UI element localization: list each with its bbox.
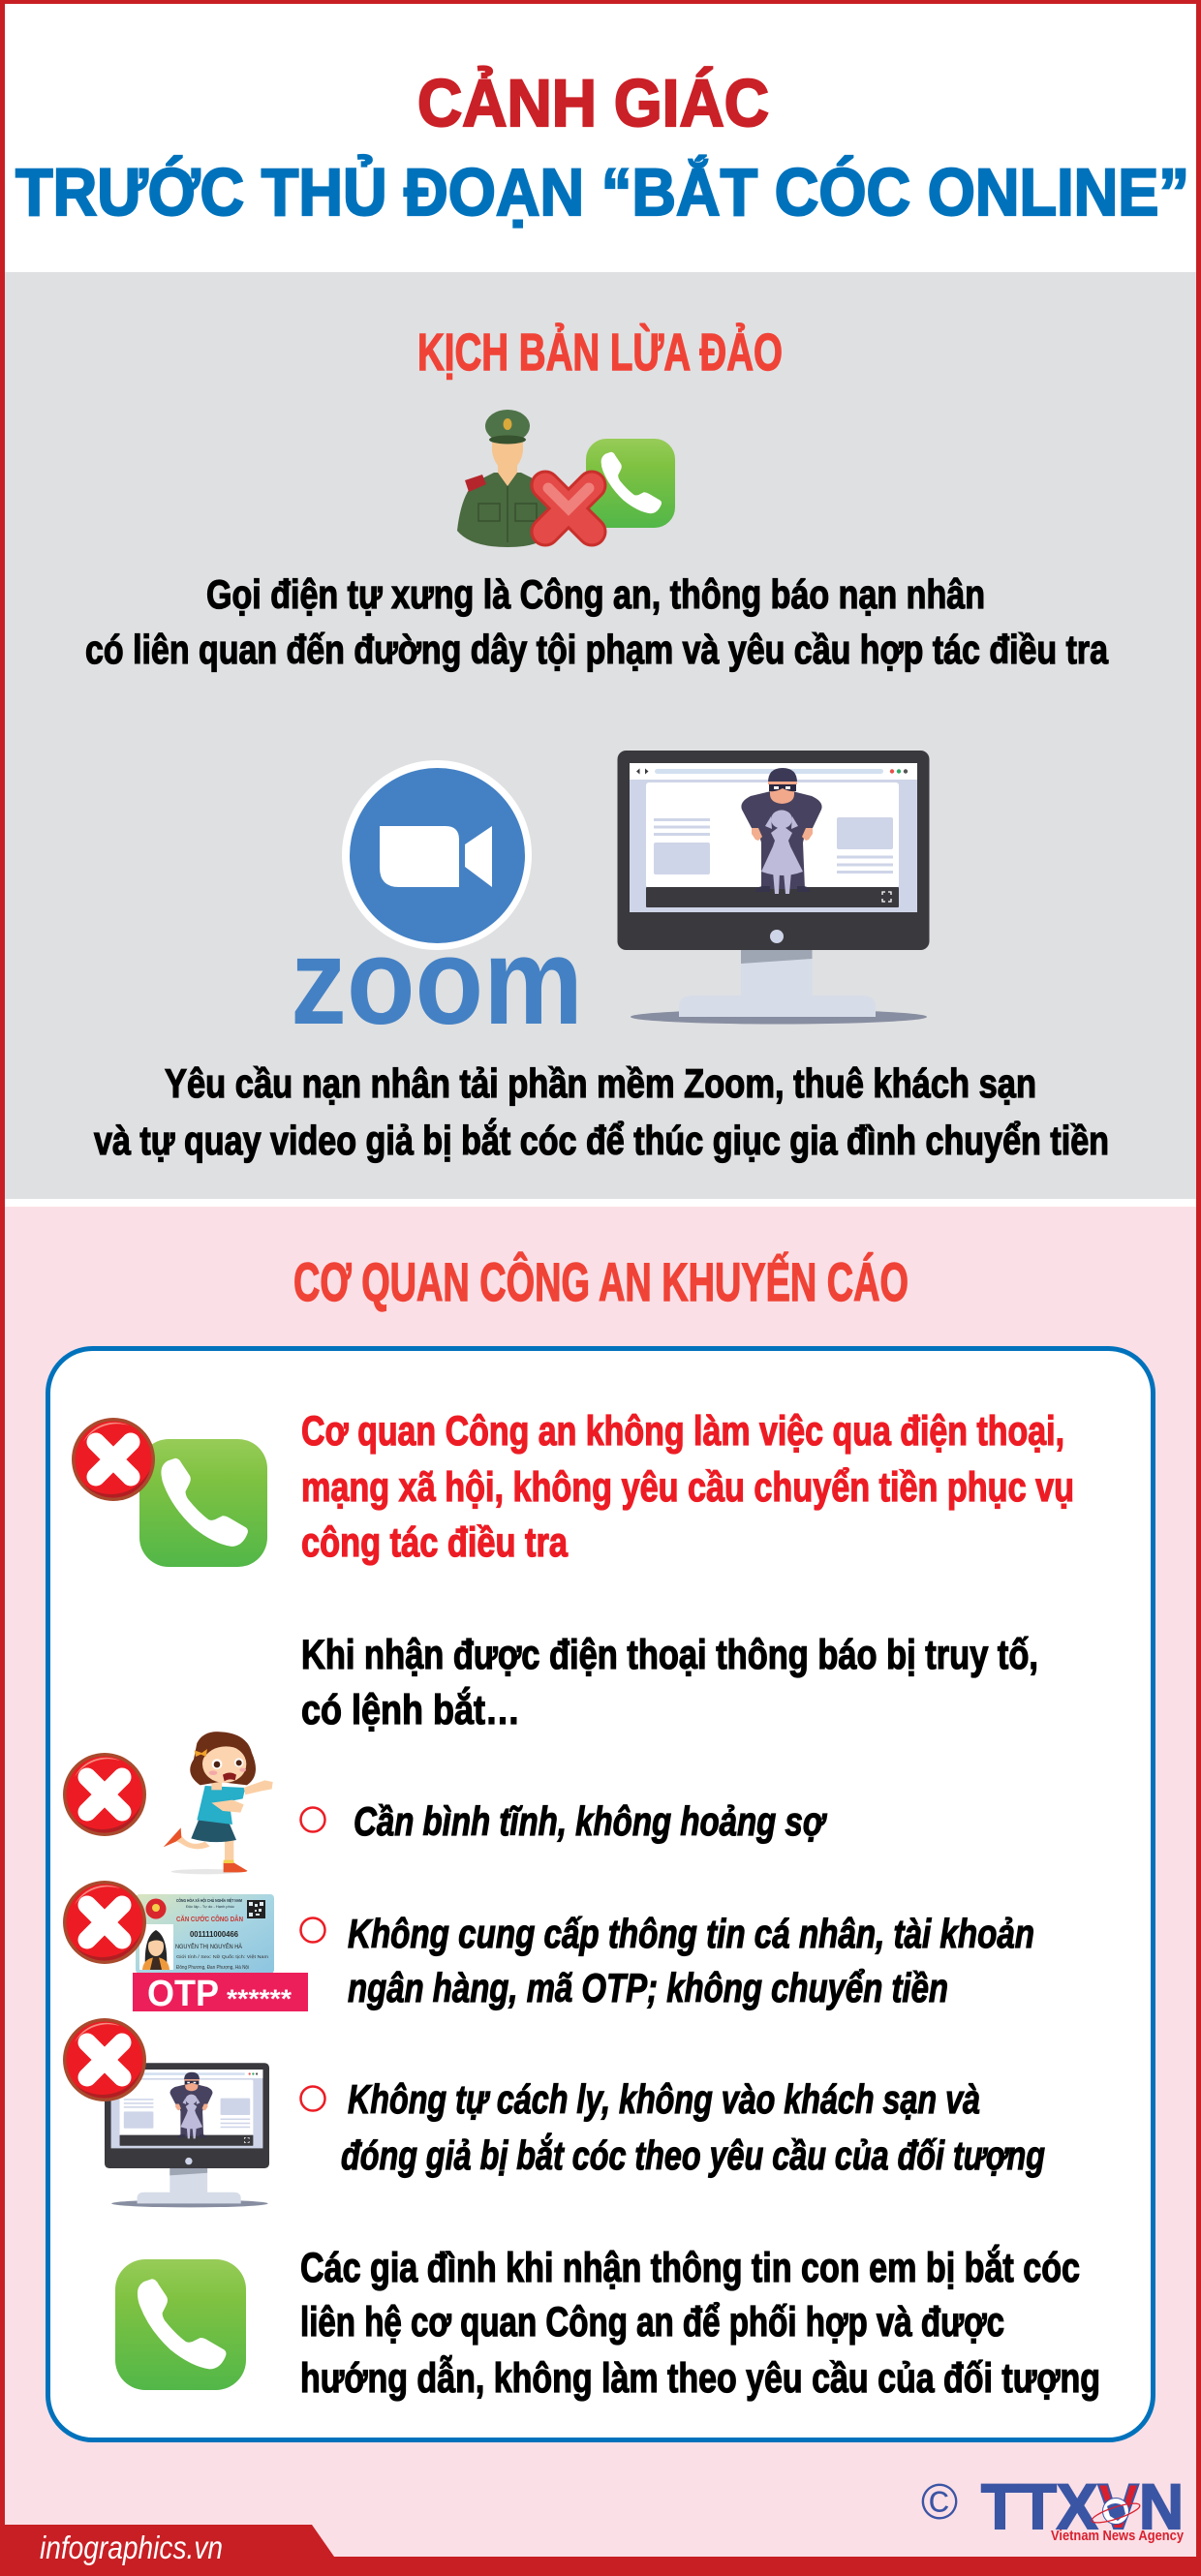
panel: police advice box: [48, 1348, 1153, 2440]
text: intro to the advice list: có lệnh bắt…: [301, 1686, 520, 1733]
icon: zoom logo: zoom: [291, 912, 583, 1050]
icon: ID card and OTP with red cross: Giới tính / Sex: Nữ Quốc tịch: Việt Nam: [176, 1954, 268, 1959]
icon: ID card and OTP with red cross: NGUYỄN THỊ NGUYÊN HÀ: [175, 1942, 243, 1950]
text: zoom scenario: Yêu cầu nạn nhân tải phần mềm Zoom, thuê khách sạn: [165, 1060, 1036, 1106]
text: advice three: Không tự cách ly, không vào khách sạn và: [348, 2076, 980, 2122]
text: intro to the advice list: Khi nhận được điện thoại thông báo bị truy tố,: [301, 1632, 1038, 1678]
title: [15, 66, 1189, 230]
logo: TTXVN: Vietnam News Agency: [1051, 2528, 1185, 2544]
text: red warning: [301, 1408, 1074, 1566]
heading: police advice: CƠ QUAN CÔNG AN KHUYẾN CÁO: [293, 1251, 908, 1312]
icon: monitor with kidnapper: [618, 751, 930, 1025]
icon: ID card and OTP with red cross: OTP: [147, 1974, 219, 2014]
logo: TTXVN: TTXVN: [981, 2470, 1184, 2542]
icon: frightened girl with red cross: [63, 1732, 273, 1874]
icon: green phone: [115, 2259, 246, 2390]
icon: ID card and OTP with red cross: [63, 1881, 308, 2014]
text: zoom scenario: [94, 1060, 1109, 1163]
text: advice one: Cần bình tĩnh, không hoảng sợ: [354, 1798, 827, 1844]
panel: scam scenario: [5, 272, 1196, 1199]
text: advice two: ngân hàng, mã OTP; không chuyển tiền: [348, 1965, 948, 2010]
icon: ID card and OTP with red cross: CĂN CƯỚC CÔNG DÂN: [176, 1915, 243, 1923]
icon: ID card and OTP with red cross: ******: [227, 1984, 293, 2013]
text: phone call scenario: [85, 571, 1109, 672]
text: red warning: công tác điều tra: [301, 1519, 569, 1566]
icon: ID card and OTP with red cross: Đông Phương, Đan Phượng, Hà Nội: [176, 1965, 249, 1971]
heading: scam scenario: KỊCH BẢN LỪA ĐẢO: [417, 323, 783, 382]
text: phone call scenario: Gọi điện tự xưng là Công an, thông báo nạn nhân: [206, 571, 985, 617]
icon: ID card and OTP with red cross: CÔNG HÒA XÃ HỘI CHỦ NGHĨA VIỆT NAM: [176, 1896, 242, 1903]
icon: ID card and OTP with red cross: Độc lập - Tự do - Hạnh phúc: [186, 1905, 234, 1909]
text: advice for families: liên hệ cơ quan Công an để phối hợp và được: [300, 2299, 1004, 2346]
text: advice for families: [300, 2244, 1100, 2402]
text: advice two: [300, 1911, 1034, 2010]
icon: ID card and OTP with red cross: 001111000466: [190, 1930, 239, 1939]
text: advice two: Không cung cấp thông tin cá nhân, tài khoản: [348, 1911, 1034, 1956]
icon: phone with red cross: [72, 1418, 267, 1567]
icon: zoom logo: [291, 760, 583, 1050]
text: advice three: [300, 2076, 1045, 2178]
icon: monitor with red cross: [63, 2018, 269, 2207]
footer: infographics.vn: infographics.vn: [40, 2530, 223, 2565]
copyright mark: ©: [921, 2474, 958, 2530]
icon: police officer with crossed phone: [457, 410, 675, 547]
title: CẢNH GIÁC: [417, 66, 769, 140]
text: intro to the advice list: [301, 1632, 1038, 1733]
